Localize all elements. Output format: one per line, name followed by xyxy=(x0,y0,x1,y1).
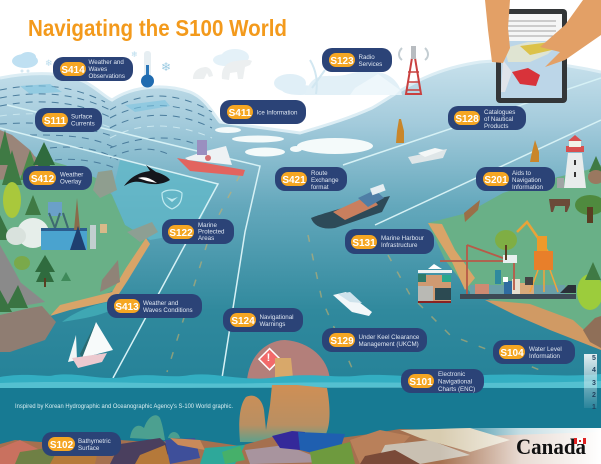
shipping lanes xyxy=(0,78,601,378)
tide gauge: 3 xyxy=(592,380,596,387)
pill: S201 xyxy=(476,167,555,191)
pill: S102: Bathymetric xyxy=(78,438,111,445)
pill: S131: Marine Harbour xyxy=(381,235,424,242)
water surface band xyxy=(0,374,601,388)
icon: marine protected shield xyxy=(162,190,182,209)
pill: S101: Navigational xyxy=(438,378,472,386)
left land xyxy=(0,130,158,352)
icon: icebreaker ship xyxy=(177,140,245,176)
pill: S101: S101 xyxy=(409,377,433,388)
pill: S413: Weather and xyxy=(143,300,179,307)
pill: S421: Route xyxy=(311,170,328,177)
lagoon xyxy=(112,160,218,240)
icon: small white ship xyxy=(408,148,447,164)
tide gauge: 5 xyxy=(592,355,596,362)
harbour with cranes and containers xyxy=(440,222,576,299)
pill: S411: S411 xyxy=(229,108,252,119)
pill: S131 xyxy=(345,229,434,254)
pill: S411: Ice Information xyxy=(256,110,298,116)
weather clouds and snowflakes: ❄ xyxy=(45,58,53,68)
pill: S101: Charts (ENC) xyxy=(438,386,475,393)
icon: hazard dome xyxy=(247,340,330,380)
pill: S124: Warnings xyxy=(260,321,285,328)
pill: S104 xyxy=(493,340,575,364)
icon: radio tower xyxy=(399,46,428,94)
pill: S129 xyxy=(322,328,427,352)
pill: S413 xyxy=(107,294,202,318)
pill: S123: S123 xyxy=(330,56,354,67)
pill: S123: Services xyxy=(358,61,382,68)
icon: orca whale xyxy=(124,165,170,186)
pill: S122: S122 xyxy=(169,228,193,239)
trees left xyxy=(0,130,71,312)
pill: S201: Navigation xyxy=(512,177,542,184)
icon: cruise ship xyxy=(333,292,372,316)
pill: S111: Surface xyxy=(71,114,93,120)
pill: S104: Water Level xyxy=(529,346,562,353)
icon: buoys xyxy=(396,119,539,162)
pill: S128: of Nautical xyxy=(484,116,513,123)
tablet with map xyxy=(496,9,567,103)
weather clouds and snowflakes: ❄ xyxy=(131,50,138,59)
Canada wordmark backdrop xyxy=(440,428,601,464)
weather clouds and snowflakes xyxy=(12,49,318,95)
title: Navigating the S100 World xyxy=(28,15,287,41)
pill: S412: Overlay xyxy=(60,178,82,186)
pill: S123: Radio xyxy=(358,54,375,61)
pill: S411 xyxy=(220,100,306,124)
icon: cargo ship xyxy=(311,184,390,229)
icon: lighthouse xyxy=(557,135,586,188)
pill: S129: Under Keel Clearance xyxy=(358,334,420,341)
pill: S129: Management (UKCM) xyxy=(358,341,419,348)
tide gauge xyxy=(584,354,597,411)
icon: moose and trees xyxy=(549,156,601,310)
pill: S122: Protected xyxy=(198,228,225,236)
pill: S128 xyxy=(448,106,526,130)
underwater rock pillars xyxy=(130,385,330,442)
hands holding tablet xyxy=(485,0,601,67)
pill: S414: Observations xyxy=(88,73,125,80)
tide gauge: 4 xyxy=(592,367,596,374)
pill: S102: Surface xyxy=(78,445,100,452)
pill: S413: Waves Conditions xyxy=(143,307,193,314)
pill: S111: S111 xyxy=(44,116,67,127)
pill: S122 xyxy=(162,219,234,244)
pill: S101: Electronic xyxy=(438,371,465,378)
pill: S128: Catalogues xyxy=(484,109,515,116)
pill: S131: Infrastructure xyxy=(381,242,418,249)
surface currents pattern xyxy=(0,84,212,168)
pill: S131: S131 xyxy=(352,238,376,249)
pill: S128: Products xyxy=(484,123,508,130)
pill: S421: S421 xyxy=(282,175,306,186)
pill: S128: S128 xyxy=(455,114,479,125)
lower sea xyxy=(0,380,601,464)
pill: S122: Marine xyxy=(198,222,217,229)
icon: thermometer xyxy=(141,51,154,88)
icon: container ship at dock xyxy=(418,264,452,303)
pill: S412: S412 xyxy=(31,174,55,185)
icon: polar bears xyxy=(193,60,252,80)
pill: S111 xyxy=(35,108,102,132)
iceberg scene xyxy=(305,60,402,95)
weather station buildings xyxy=(6,198,107,250)
pill: S123 xyxy=(322,48,392,72)
pill: S421: Exchange xyxy=(311,177,339,184)
pill: S414: Weather and xyxy=(88,59,124,66)
pill: S201: Aids to xyxy=(512,170,531,177)
pill: S129: S129 xyxy=(330,336,354,347)
Canada wordmark: Canada xyxy=(516,434,586,459)
pill: S104: S104 xyxy=(500,348,524,359)
seabed bathymetric surface xyxy=(0,428,601,464)
tide gauge: 2 xyxy=(592,392,596,399)
pill: S201: S201 xyxy=(484,175,508,186)
ice floes xyxy=(215,127,373,156)
pill: S124: Navigational xyxy=(260,314,294,321)
pill: S124: S124 xyxy=(231,316,255,327)
icon: hazard dome: ! xyxy=(267,352,270,364)
pill: S414 xyxy=(53,57,133,81)
pill: S421: format xyxy=(311,184,329,191)
pill: S414: Waves xyxy=(88,66,107,73)
icon: sailboat xyxy=(68,322,113,368)
pill: S421 xyxy=(275,167,347,191)
weather clouds and snowflakes: ❄ xyxy=(161,60,171,74)
pill: S412 xyxy=(23,166,92,190)
pill: S111: Currents xyxy=(71,120,95,128)
right land xyxy=(428,165,601,350)
pill: S101 xyxy=(401,369,484,393)
pill: S102: S102 xyxy=(50,440,74,451)
tide gauge: 1 xyxy=(592,404,596,411)
pill: S414: S414 xyxy=(61,65,85,76)
pill: S104: Information xyxy=(529,353,561,360)
pill: S122: Areas xyxy=(198,235,214,242)
pill: S124 xyxy=(223,308,303,332)
pill: S102 xyxy=(42,432,121,456)
pill: S201: Information xyxy=(512,184,544,191)
pill: S413: S413 xyxy=(115,302,139,313)
pill: S412: Weather xyxy=(60,172,83,178)
credit text: Inspired by Korean Hydrographic and Oceanographic Agency's S-100 World graphic. xyxy=(15,403,233,410)
